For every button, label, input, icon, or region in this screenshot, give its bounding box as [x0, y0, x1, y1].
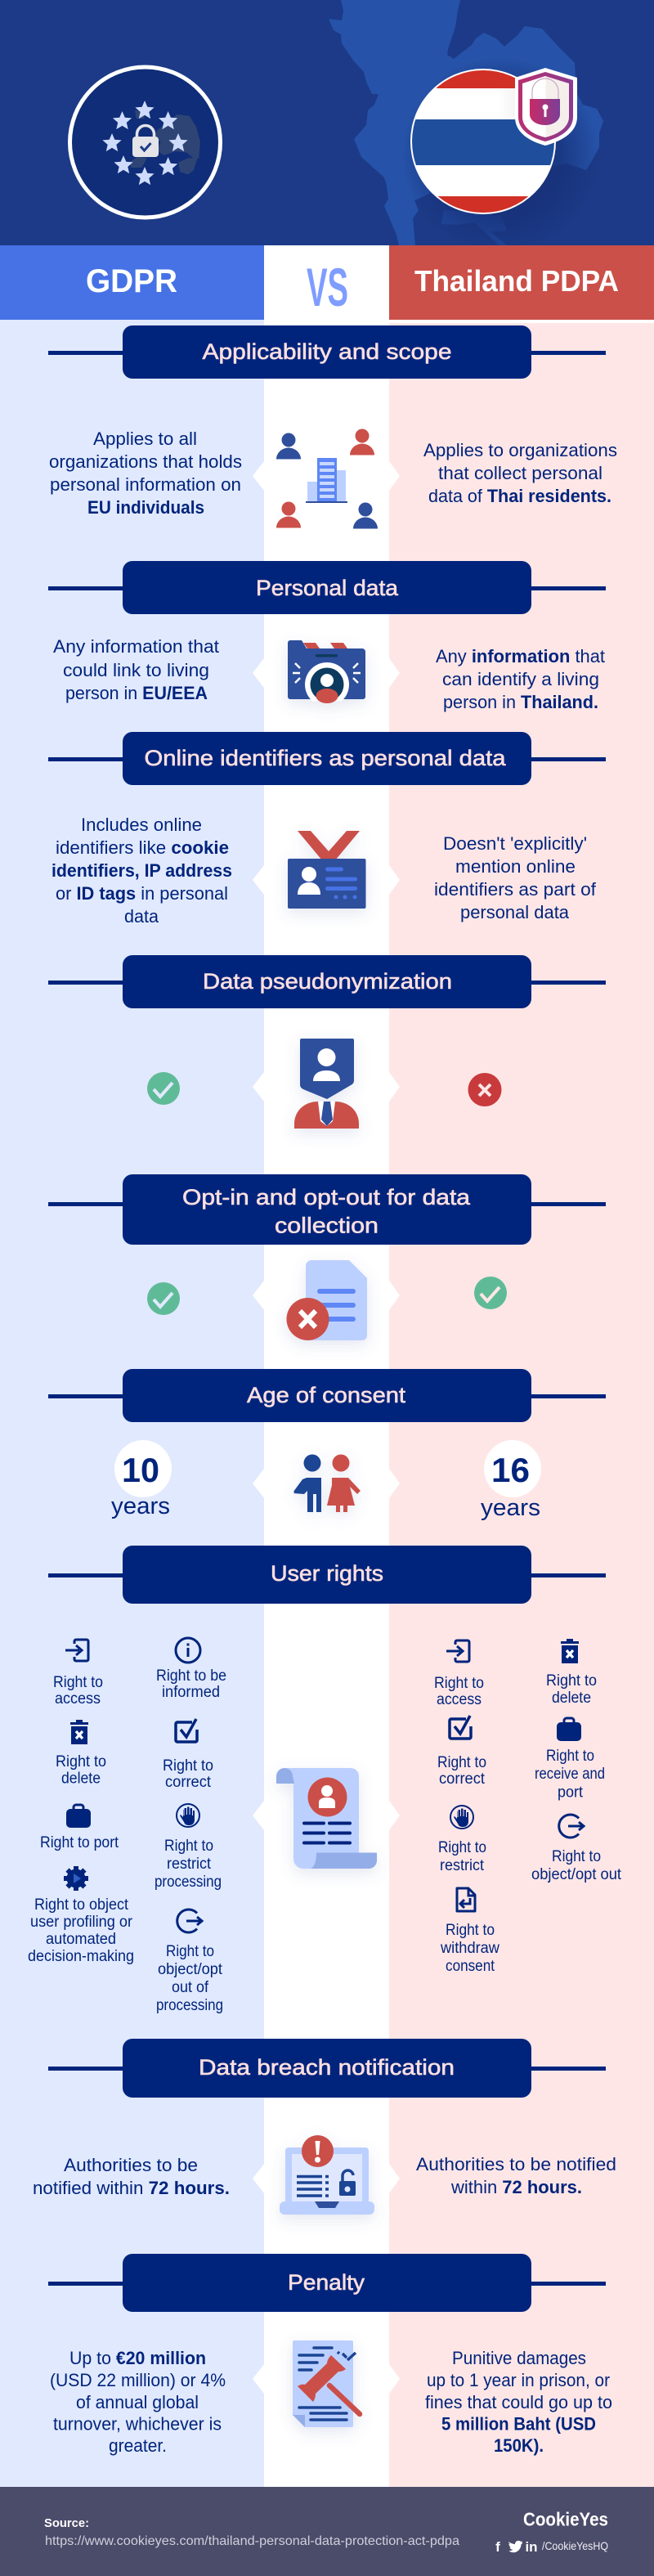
PDPA personal data text — [436, 646, 606, 712]
GDPR penalty text: of annual global — [76, 2392, 199, 2412]
GDPR penalty text: turnover, whichever is — [53, 2414, 222, 2434]
GDPR penalty text: greater. — [109, 2435, 167, 2456]
section heading: Applicability and scope — [48, 325, 606, 379]
GDPR check mark — [147, 1072, 180, 1105]
source: Source: — [44, 2516, 89, 2530]
section heading: Penalty: Penalty — [288, 2270, 365, 2295]
section heading: Opt-in and opt-out: Opt-in and opt-out for data — [182, 1185, 471, 1209]
GDPR penalty text — [50, 2348, 226, 2456]
right to object to profiling: Right to object — [34, 1896, 129, 1914]
GDPR rights list — [28, 1638, 226, 2014]
right to withdraw consent: Right to — [446, 1922, 495, 1939]
header: GDPR — [0, 245, 264, 320]
PDPA breach text: Authorities to be notified — [416, 2154, 616, 2174]
right to object or opt out of processing: out of — [172, 1979, 209, 1996]
Thailand map silhouette — [329, 0, 603, 255]
right to access: access — [437, 1691, 482, 1708]
GDPR online identifiers text — [52, 815, 232, 927]
PDPA breach text — [416, 2154, 616, 2197]
source — [44, 2516, 459, 2548]
PDPA penalty text: fines that could go up to — [425, 2392, 612, 2412]
PDPA penalty text: 5 million Baht (USD — [441, 2414, 596, 2434]
right to receive and port: port — [558, 1784, 584, 1801]
PDPA penalty text — [425, 2348, 612, 2456]
section heading: Online identifiers — [48, 732, 606, 785]
source: https://www.cookieyes.com/thailand-personal-data-protection-act-pdpa — [45, 2534, 459, 2548]
PDPA online identifiers text: identifiers as part of — [434, 879, 597, 900]
PDPA online identifiers text: Doesn't 'explicitly' — [443, 833, 587, 854]
GDPR applicability text: EU individuals — [87, 497, 204, 518]
GDPR applicability text — [49, 429, 242, 518]
right to object or opt out of processing: object/opt — [158, 1961, 223, 1978]
right to delete: Right to — [56, 1753, 106, 1770]
section heading: User rights: User rights — [271, 1561, 383, 1586]
PDPA check mark — [474, 1277, 507, 1309]
right to delete — [546, 1639, 597, 1707]
GDPR check mark — [147, 1282, 180, 1315]
right to receive and port: receive and — [535, 1766, 605, 1783]
section heading: Online identifiers: Online identifiers as personal data — [144, 746, 507, 770]
header: GDPR: GDPR — [86, 263, 177, 299]
header: Thailand PDPA — [389, 245, 654, 320]
right to delete: delete — [61, 1770, 101, 1788]
shield — [515, 68, 577, 146]
section heading: Age of consent — [48, 1369, 606, 1422]
PDPA age of consent: 16 years: 16 — [491, 1451, 530, 1489]
right to object to profiling: automated — [46, 1931, 116, 1948]
right to restrict: Right to — [438, 1839, 486, 1856]
right to access: access — [55, 1690, 101, 1708]
right to be informed: informed — [162, 1684, 220, 1701]
right to object or opt out: Right to — [552, 1848, 601, 1865]
icon: masked person — [294, 1039, 359, 1129]
PDPA personal data text: can identify a living — [442, 669, 599, 689]
GDPR personal data text — [53, 636, 220, 703]
PDPA age of consent: 16 years: years — [481, 1495, 540, 1521]
icon: boy and girl — [293, 1454, 361, 1512]
icon: folder with person — [288, 640, 365, 707]
right to delete — [56, 1720, 106, 1788]
GDPR applicability text: Applies to all — [93, 429, 197, 449]
right to correct — [163, 1719, 213, 1791]
right to correct: correct — [165, 1774, 212, 1791]
right to withdraw consent: consent — [446, 1958, 495, 1975]
right to object or opt out of processing — [156, 1910, 223, 2014]
right to delete: Right to — [546, 1672, 597, 1690]
icon: scroll with profile — [276, 1768, 377, 1869]
right to be informed: Right to be — [156, 1667, 226, 1685]
right to correct: correct — [439, 1770, 486, 1788]
GDPR applicability text: personal information on — [50, 474, 241, 495]
PDPA online identifiers text: mention online — [455, 856, 576, 877]
right to object to profiling — [28, 1866, 134, 1965]
right to port: Right to port — [40, 1834, 119, 1851]
GDPR applicability text: organizations that holds — [49, 451, 242, 472]
right to correct: Right to — [437, 1754, 486, 1771]
right to receive and port: Right to — [546, 1748, 594, 1765]
PDPA penalty text: Punitive damages — [452, 2348, 586, 2368]
PDPA rights list — [434, 1639, 622, 1975]
GDPR personal data text: Any information that — [53, 636, 220, 657]
section heading: Data pseudonymization — [48, 955, 606, 1008]
GDPR personal data text: person in EU/EEA — [65, 683, 208, 703]
GDPR personal data text: could link to living — [63, 660, 209, 680]
GDPR penalty text: (USD 22 million) or 4% — [50, 2370, 226, 2390]
icon: laptop with alert — [280, 2135, 374, 2215]
GDPR online identifiers text: or ID tags in personal — [56, 883, 228, 904]
right to object to profiling: decision-making — [28, 1948, 134, 1965]
right to port — [40, 1805, 119, 1851]
right to object or opt out of processing: processing — [156, 1997, 223, 2014]
section heading: Data breach notification: Data breach notification — [199, 2055, 455, 2080]
social handles — [495, 2539, 608, 2555]
section heading: Applicability and scope: Applicability and scope — [203, 339, 451, 364]
header: VS: VS — [307, 257, 348, 317]
GDPR emblem — [70, 67, 221, 218]
right to correct: Right to — [163, 1757, 213, 1775]
GDPR online identifiers text: identifiers like cookie — [56, 837, 229, 858]
section heading: Opt-in and opt-out: collection — [275, 1214, 379, 1238]
right to restrict processing — [155, 1804, 222, 1891]
icon: document with gavel — [293, 2340, 360, 2427]
PDPA online identifiers text — [434, 833, 597, 922]
right to delete: delete — [552, 1690, 591, 1707]
right to withdraw consent: withdraw — [440, 1940, 499, 1957]
right to withdraw consent — [440, 1888, 499, 1975]
right to access — [434, 1640, 484, 1708]
PDPA breach text: within 72 hours. — [450, 2177, 582, 2197]
section heading: User rights — [48, 1546, 606, 1604]
PDPA cross mark — [468, 1073, 502, 1106]
section heading: Age of consent: Age of consent — [247, 1383, 406, 1407]
right to correct — [437, 1716, 486, 1788]
GDPR age of consent: 10 years: years — [111, 1493, 170, 1519]
section heading: Penalty — [48, 2254, 606, 2312]
right to object to profiling: user profiling or — [30, 1914, 133, 1931]
faint Europe globe — [129, 110, 200, 174]
right to restrict processing: processing — [155, 1874, 222, 1891]
right to access: Right to — [53, 1674, 103, 1691]
section heading: Personal data: Personal data — [256, 576, 399, 600]
social handles: f — [495, 2539, 500, 2555]
GDPR penalty text: Up to €20 million — [69, 2348, 206, 2368]
GDPR online identifiers text: Includes online — [81, 815, 202, 835]
right to be informed — [156, 1638, 226, 1701]
icon: ID badge — [288, 831, 366, 909]
section heading: Opt-in and opt-out — [48, 1174, 606, 1245]
PDPA penalty text: 150K). — [494, 2435, 544, 2456]
PDPA applicability text: data of Thai residents. — [428, 486, 611, 506]
right to object or opt out — [531, 1815, 622, 1883]
GDPR breach text — [33, 2155, 230, 2198]
banner — [0, 0, 654, 255]
right to access — [53, 1640, 103, 1708]
right to restrict processing: Right to — [164, 1838, 213, 1855]
PDPA personal data text: person in Thailand. — [443, 692, 598, 712]
section heading: Data breach notification — [48, 2039, 606, 2098]
Thailand flag emblem — [409, 68, 577, 216]
PDPA applicability text: that collect personal — [438, 463, 602, 483]
social handles: in — [525, 2539, 538, 2555]
PDPA personal data text: Any information that — [436, 646, 606, 666]
right to receive and port — [535, 1718, 605, 1801]
PDPA applicability text — [423, 440, 617, 506]
right to restrict — [438, 1806, 486, 1874]
GDPR age of consent: 10 years — [111, 1440, 172, 1519]
PDPA penalty text: up to 1 year in prison, or — [427, 2370, 610, 2390]
GDPR online identifiers text: identifiers, IP address — [52, 860, 232, 881]
GDPR breach text: Authorities to be — [64, 2155, 198, 2175]
CookieYes logo: CookieYes — [523, 2509, 608, 2530]
PDPA online identifiers text: personal data — [460, 902, 569, 922]
GDPR age of consent: 10 years: 10 — [122, 1451, 159, 1489]
section heading: Data pseudonymization: Data pseudonymization — [203, 969, 452, 994]
right to object or opt out of processing: Right to — [166, 1943, 214, 1960]
PDPA age of consent: 16 years — [481, 1440, 541, 1521]
PDPA applicability text: Applies to organizations — [423, 440, 617, 460]
right to restrict: restrict — [440, 1857, 485, 1874]
section heading: Personal data — [48, 561, 606, 614]
right to object or opt out: object/opt out — [531, 1866, 622, 1883]
right to access: Right to — [434, 1675, 484, 1692]
icon: document with cross — [286, 1260, 367, 1340]
social handles: /CookieYesHQ — [542, 2539, 608, 2552]
footer — [0, 2487, 654, 2576]
GDPR breach text: notified within 72 hours. — [33, 2178, 230, 2198]
icon: people and building — [276, 429, 378, 528]
GDPR online identifiers text: data — [124, 906, 159, 927]
right to restrict processing: restrict — [167, 1856, 212, 1873]
header: Thailand PDPA: Thailand PDPA — [414, 264, 619, 298]
